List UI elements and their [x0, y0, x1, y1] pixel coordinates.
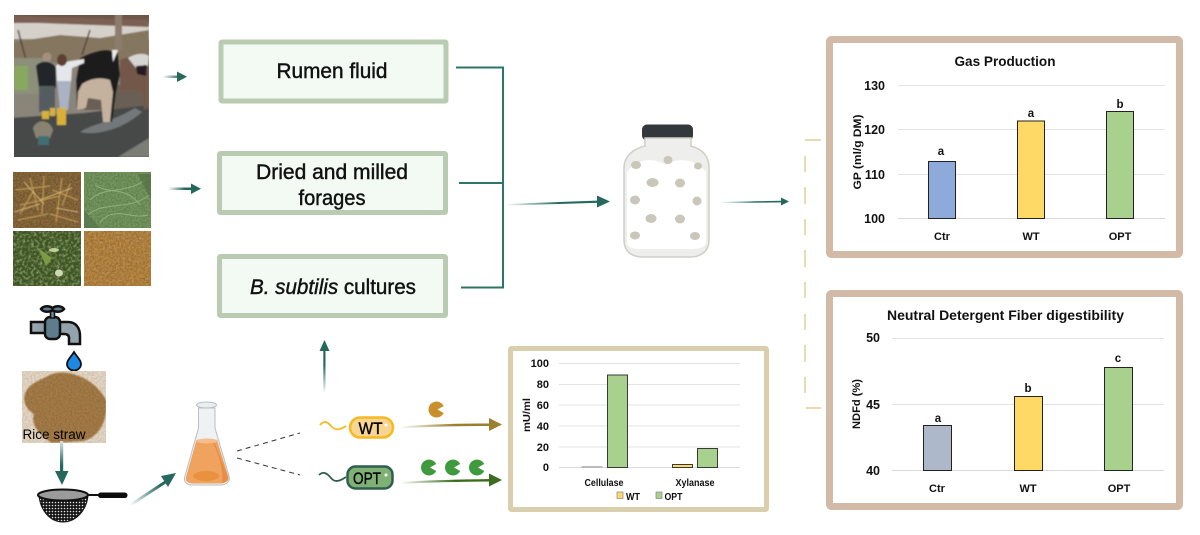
chart title: Gas Production: [954, 53, 1056, 69]
bacterium: OPT strain: OPT: [353, 469, 381, 488]
box: rumen fluid: Rumen fluid: [276, 59, 388, 83]
y axis labels: 100: [864, 212, 885, 226]
bacterium: WT strain: WT: [358, 419, 382, 438]
bracket connector: [456, 68, 503, 288]
arrow: jar to results: [720, 198, 789, 206]
category labels: OPT: [1109, 231, 1132, 243]
category labels: WT: [1022, 231, 1040, 243]
y axis labels: 0: [543, 462, 549, 474]
icon: enzyme (WT): [429, 402, 444, 418]
photo: straw forage: [13, 172, 81, 228]
box: dried and milled forages: [220, 154, 446, 212]
label: rice straw: Rice straw: [22, 427, 86, 442]
legend: OPT: [664, 491, 683, 503]
bacterium: OPT strain: [319, 466, 392, 488]
y axis labels: 45: [866, 398, 880, 412]
woman: [56, 59, 84, 82]
photo: milled forage: [84, 231, 151, 286]
photo: silage forage: [13, 231, 81, 286]
y axis labels: [864, 79, 885, 226]
box: B. subtilis cultures: [220, 256, 446, 316]
bars: [928, 112, 1134, 218]
y axis labels: 40: [537, 421, 549, 433]
category labels: [929, 483, 1131, 495]
chart title: Neutral Detergent Fiber digestibility: [887, 307, 1124, 323]
cow 2: [120, 55, 149, 110]
arrow: cows to rumen fluid: [163, 72, 187, 82]
category labels: OPT: [1108, 483, 1131, 495]
box: B. subtilis cultures: B. subtilis cultures: [250, 275, 416, 299]
icon: strainer: [38, 490, 128, 522]
y axis labels: 80: [537, 379, 549, 391]
y axis title: mU/ml: [521, 398, 533, 432]
box: dried and milled forages: forages: [298, 186, 366, 210]
y axis labels: 20: [537, 442, 549, 454]
bars: [924, 368, 1132, 470]
arrow: OPT to enzyme chart: [400, 474, 502, 486]
legend: [617, 491, 683, 503]
cow 1: [76, 50, 120, 122]
dashed lines from flask to strains: [237, 433, 300, 475]
bars: [582, 375, 718, 468]
panel: enzyme activity chart: [510, 348, 766, 510]
category labels: Ctr: [934, 231, 951, 243]
bucket and cloth: [33, 121, 53, 138]
y axis labels: 100: [531, 358, 549, 370]
category labels: Ctr: [929, 483, 946, 495]
y axis labels: 60: [537, 400, 549, 412]
panel: NDF digestibility chart: [830, 294, 1180, 506]
significance letters: b: [1024, 383, 1032, 395]
significance letters: b: [1116, 99, 1124, 111]
y axis title: GP (ml/g DM): [852, 114, 864, 190]
category labels: Cellulase: [584, 477, 624, 489]
dashed connector to result charts: [805, 140, 821, 408]
man: [36, 62, 56, 88]
y axis labels: 40: [866, 464, 880, 478]
y axis labels: [866, 331, 880, 478]
arrow: forages to dried forages: [168, 184, 201, 194]
y axis labels: 110: [865, 168, 885, 182]
icon: water tap: [31, 306, 80, 344]
category labels: WT: [1019, 483, 1037, 495]
significance letters: a: [935, 413, 942, 425]
y axis labels: 50: [866, 331, 880, 345]
legend: WT: [626, 491, 640, 503]
photo: green hay forage: [84, 172, 151, 228]
panel: gas production chart: [830, 40, 1180, 254]
arrow: WT to enzyme chart: [400, 418, 502, 431]
y axis labels: [531, 358, 549, 474]
arrow: inputs to jar: [506, 196, 610, 208]
box: rumen fluid: [221, 42, 446, 101]
y axis title: NDFd (%): [851, 379, 863, 429]
box: dried and milled forages: Dried and milled: [256, 160, 408, 184]
significance letters: a: [938, 146, 945, 158]
y axis labels: 120: [864, 123, 885, 137]
arrow: rice straw to strainer: [55, 441, 68, 485]
icon: water drop: [67, 352, 81, 371]
arrow: WT to B. subtilis cultures: [320, 340, 330, 393]
significance letters: [938, 99, 1124, 158]
photo: cows and people in a barn: [14, 15, 149, 157]
icon: conical flask with orange culture: [184, 402, 229, 485]
significance letters: [935, 353, 1122, 425]
y axis labels: 130: [864, 79, 885, 93]
bacterium: WT strain: [320, 418, 393, 438]
panel: enzyme activity chart: Xylanase: [676, 477, 715, 489]
significance letters: c: [1115, 353, 1122, 365]
arrow: strainer to flask: [130, 473, 176, 506]
photo: rice straw: [22, 371, 106, 443]
category labels: [934, 231, 1132, 243]
icons: enzymes (OPT): [421, 460, 484, 476]
icon: fermentation jar: [624, 124, 709, 257]
significance letters: a: [1028, 108, 1035, 120]
